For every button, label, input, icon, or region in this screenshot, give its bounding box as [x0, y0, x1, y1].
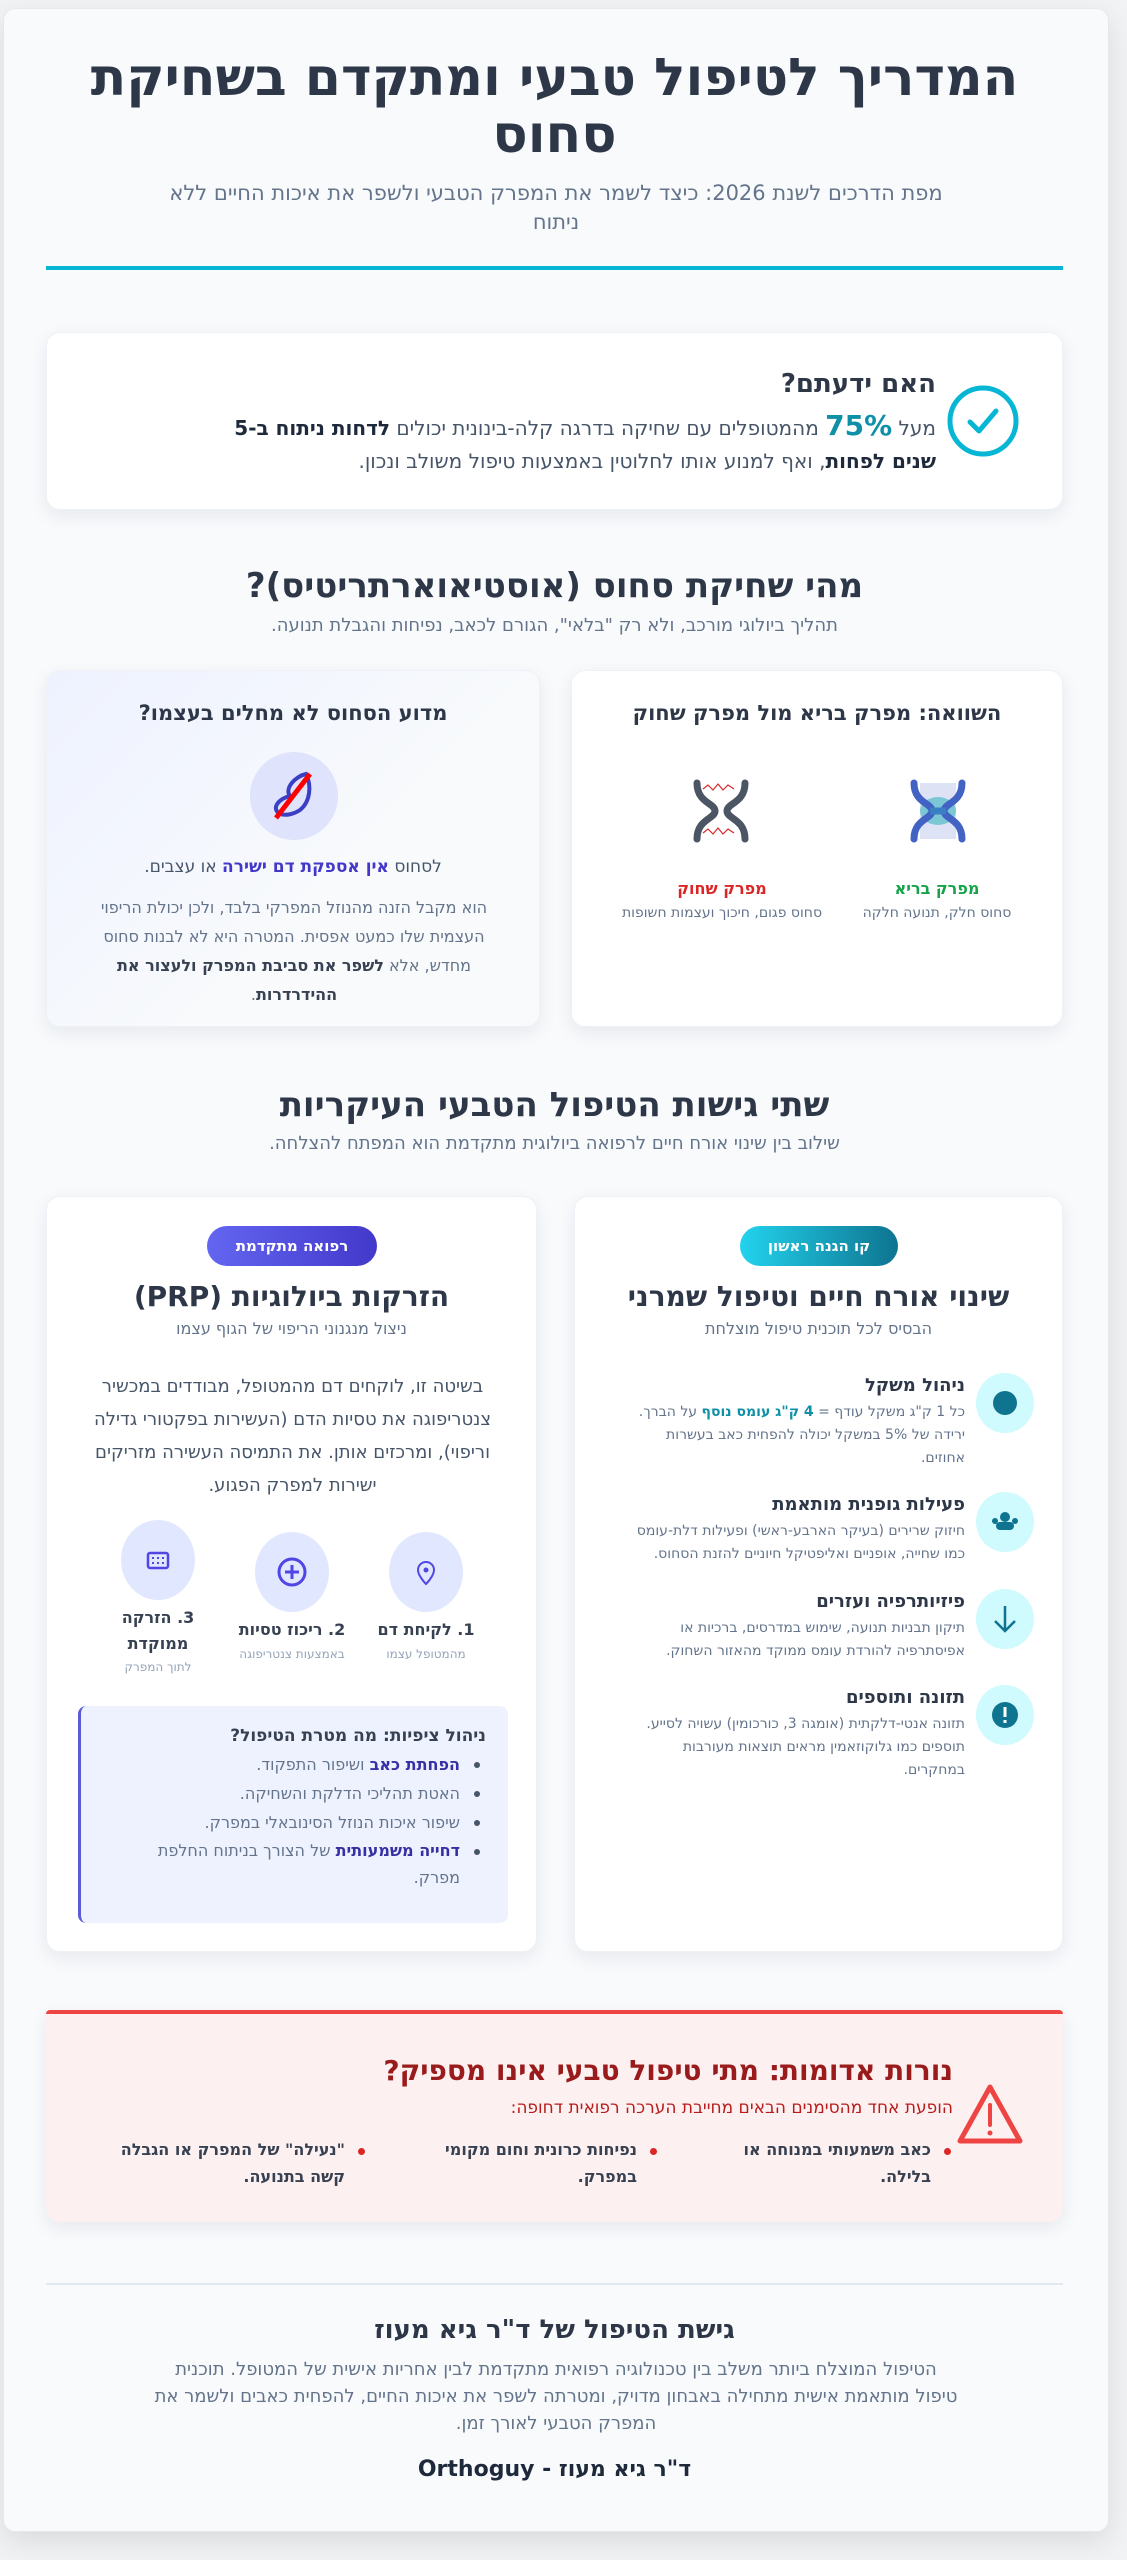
panel: comparison: סחוס חלק, תנועה חלקה: [863, 905, 1011, 921]
panel: PRP: [46, 1196, 537, 1952]
item: weight: [639, 1373, 1034, 1466]
step 2: centrifuge: [255, 1532, 329, 1612]
label: healthy: מפרק בריא: [895, 879, 979, 898]
steps: 1. לקיחת דם: [378, 1620, 474, 1639]
item: nutrition: [646, 1685, 1034, 1778]
expectations list: דחייה משמעותית של הצורך בניתוח החלפת מפרק.: [158, 1841, 460, 1887]
red flags heading: נורות אדומות: מתי טיפול טבעי אינו מספיק?: [383, 2054, 953, 2087]
icon: arrow down: [976, 1589, 1034, 1649]
red flag item 2: נפיחות כרונית וחום מקומי במפרק.: [445, 2140, 637, 2186]
footer text: המפרק הטבעי לאורך זמן.: [456, 2413, 656, 2434]
panel heading: השוואה: מפרק בריא מול מפרק שחוק: [633, 701, 1001, 725]
item: weight: ניהול משקל: [865, 1375, 965, 1396]
section subtitle: תהליך ביולוגי מורכב, ולא רק "בלאי", הגורם לכאב, נפיחות והגבלת תנועה.: [271, 615, 838, 636]
panel: PRP: ניצול מנגנוני הריפוי של הגוף עצמו: [176, 1319, 407, 1338]
icon: warning: [958, 2084, 1022, 2144]
callout heading: האם ידעתם?: [781, 369, 936, 399]
PRP description: בשיטה זו, לוקחים דם מהמטופל, מבודדים במכשיר צנטריפוגה את טסיות הדם (העשירות בפקטורי גדילה וריפוי), ומרכזים אותן. את התמיסה העשירה מזריקים ישירות למפרק הפגוע.: [94, 1376, 491, 1496]
footer divider: [46, 2283, 1063, 2285]
title: המדריך לטיפול טבעי ומתקדם בשחיקת סחוס: [91, 48, 1018, 165]
panel: comparison: סחוס פגום, חיכוך ועצמות חשופות: [622, 905, 822, 921]
footer text: טיפול מותאמת אישית מתחילה באבחון מדויק, ומטרתה לשפר את איכות החיים, להפחית כאבים ולשמר את: [155, 2386, 957, 2407]
item: physio: [666, 1589, 1034, 1659]
section subtitle: שילוב בין שינוי אורח חיים לרפואה ביולוגית מתקדמת הוא המפתח להצלחה.: [269, 1133, 840, 1154]
footer text: [154, 2359, 957, 2434]
item: weight: כל 1 ק"ג משקל עודף = 4 ק"ג עומס נוסף על הברך. ירידה של 5% במשקל יכולה להפחית כאב בעשרות אחוזים.: [639, 1404, 965, 1466]
section heading: what is: מהי שחיקת סחוס (אוסטיאוארתריטיס)?: [246, 566, 863, 606]
steps: לתוך המפרק: [124, 1660, 192, 1674]
expectations heading: ניהול ציפיות: מה מטרת הטיפול?: [230, 1726, 486, 1746]
expectations box: [78, 1706, 508, 1923]
icon: dot: [976, 1373, 1034, 1433]
red flag item 1: כאב משמעותי במנוחה או בלילה.: [744, 2140, 931, 2186]
item: activity: [637, 1492, 1034, 1562]
expectations list: הפחתת כאב ושיפור התפקוד.: [256, 1755, 460, 1774]
badge: [740, 1226, 898, 1266]
callout: did you know: [46, 332, 1063, 510]
item: nutrition: תזונה ותוספים: [846, 1687, 965, 1708]
steps: [121, 1520, 474, 1674]
callout text: מעל 75% מהמטופלים עם שחיקה בדרגה קלה-בינונית יכולים לדחות ניתוח ב-5 שנים לפחות, ואף למנוע אותו לחלוטין באמצעות טיפול משולב ונכון.: [234, 409, 936, 473]
steps: באמצעות צנטריפוגה: [239, 1647, 345, 1661]
red flag item 3: "נעילה" של המפרק או הגבלה קשה בתנועה.: [121, 2140, 345, 2186]
icon: no blood supply: [250, 752, 338, 840]
step 1: blood draw: [389, 1532, 463, 1612]
section heading: two approaches: שתי גישות הטיפול הטבעי העיקריות: [280, 1085, 829, 1125]
badge: קו הגנה ראשון: [768, 1237, 870, 1255]
expectations list: שיפור איכות הנוזל הסינובאלי במפרק.: [205, 1813, 460, 1832]
footer heading: גישת הטיפול של ד"ר גיא מעוז: [374, 2315, 735, 2345]
panel heading: מדוע הסחוס לא מחלים בעצמו?: [139, 701, 447, 725]
steps: 3. הזרקה ממוקדת: [122, 1608, 194, 1653]
red flags subtitle: הופעת אחד מהסימנים הבאים מחייבת הערכה רפואית דחופה:: [511, 2098, 953, 2118]
panel heading: שינוי אורח חיים וטיפול שמרני: [628, 1280, 1009, 1313]
item: nutrition: תזונה אנטי-דלקתית (אומגה 3, כורכומין) עשויה לסייע. תוספים כמו גלוקוזאמין מראים תוצאות מעורבות במחקרים.: [646, 1716, 965, 1778]
footer text: הטיפול המוצלח ביותר משלב בין טכנולוגיה רפואית מתקדמת לבין אחריות אישית של המטופל. תוכנית: [175, 2359, 937, 2380]
text: no blood supply: לסחוס אין אספקת דם ישירה או עצבים.: [144, 857, 442, 877]
icon: exclamation: [976, 1685, 1034, 1745]
steps: 2. ריכוז טסיות: [239, 1620, 345, 1639]
panel: lifestyle: הבסיס לכל תוכנית טיפול מוצלחת: [705, 1319, 932, 1338]
header underline: [46, 266, 1063, 270]
panel: lifestyle: [574, 1196, 1063, 1952]
badge: רפואה מתקדמת: [236, 1237, 348, 1255]
item: activity: פעילות גופנית מותאמת: [772, 1494, 965, 1515]
icon: check circle: [948, 386, 1018, 456]
signature: ד"ר גיא מעוז - Orthoguy: [418, 2457, 691, 2482]
expectations list: [158, 1755, 480, 1887]
expectations list: האטת תהליכי הדלקת והשחיקה.: [240, 1784, 460, 1803]
paragraph: הוא מקבל הזנה מהנוזל המפרקי בלבד, ולכן יכולת הריפוי העצמית שלו כמעט אפסית. המטרה היא לא לבנות סחוס מחדש, אלא לשפר את סביבת המפרק ולעצור את ההידרדרות.: [101, 898, 487, 1004]
panel heading: הזרקות ביולוגיות (PRP): [134, 1280, 449, 1313]
badge: [207, 1226, 377, 1266]
subtitle: מפת הדרכים לשנת 2026: כיצד לשמר את המפרק הטבעי ולשפר את איכות החיים ללא ניתוח: [169, 181, 943, 234]
item: physio: פיזיותרפיה ועזרים: [816, 1591, 965, 1612]
item: physio: תיקון תבניות תנועה, שימוש במדרסים, ברכיות או אפיסתרפיה להורדת עומס ממוקד מהאזור השחוק.: [666, 1620, 965, 1659]
label: damaged: מפרק שחוק: [677, 879, 767, 898]
steps: מהמטופל עצמו: [386, 1647, 466, 1661]
panel: red flags: [46, 2010, 1063, 2222]
icon: healthy joint: [910, 780, 966, 842]
item: activity: חיזוק שרירים (בעיקר הארבע-ראשי) ופעילות דלת-עומס כמו שחייה, אופניים ואליפטיקל חיוניים להזנת הסחוס.: [637, 1523, 965, 1562]
step 3: injection: [121, 1520, 195, 1600]
icon: damaged joint: [694, 780, 748, 842]
panel: comparison: [571, 670, 1063, 1027]
icon: people: [976, 1492, 1034, 1552]
panel: why cartilage doesn't heal: [46, 670, 540, 1027]
